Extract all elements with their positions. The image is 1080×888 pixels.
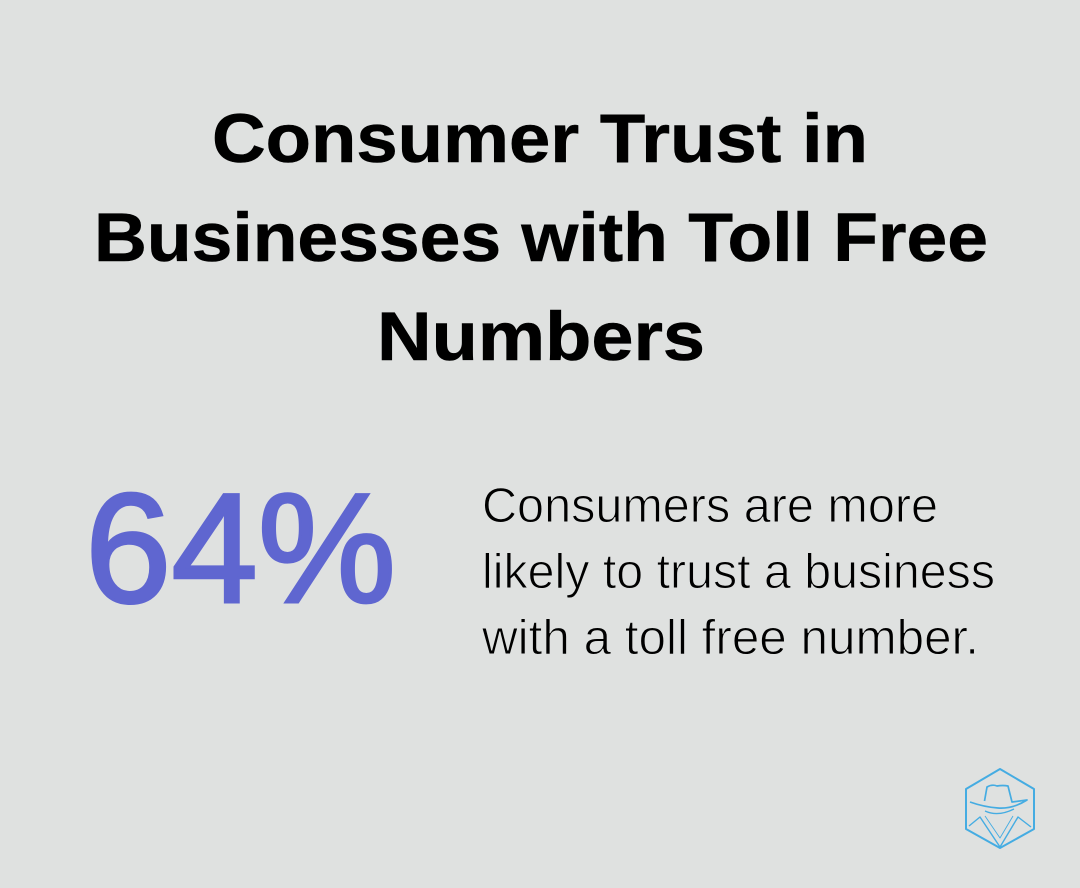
title — [94, 100, 988, 375]
title: Businesses with Toll Free — [94, 199, 988, 276]
statistic: 64%: 64% — [85, 462, 396, 636]
title: Numbers — [377, 298, 705, 375]
description text: likely to trust a business — [482, 545, 995, 599]
icon: hexagon logo with hat — [966, 769, 1034, 848]
title: Consumer Trust in — [212, 100, 868, 177]
description text: with a toll free number. — [481, 611, 979, 665]
description text: Consumers are more — [482, 479, 938, 533]
description text — [481, 479, 995, 665]
